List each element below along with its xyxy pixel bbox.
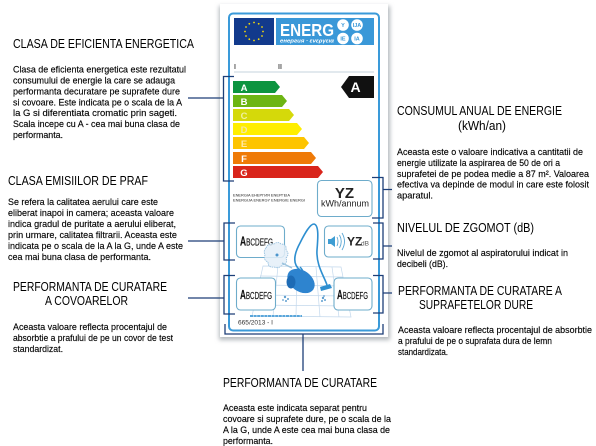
energy label card [219, 4, 390, 340]
text: cleaning performance [223, 403, 392, 446]
bracket: noise [373, 223, 392, 259]
icon: dust specks [282, 295, 326, 302]
dust band [250, 315, 302, 317]
text: annual energy consumption: energie utilizate la aspirarea de 50 de ori a [397, 158, 561, 168]
energy consumption box [318, 180, 372, 216]
efficiency scale arrows [233, 81, 323, 179]
noise box [324, 226, 372, 257]
text: efficiency class: Scala incepe cu A - cea mai buna clasa de [13, 119, 180, 129]
text: noise level [397, 248, 568, 269]
icon: EU flag [234, 18, 274, 45]
efficiency scale arrows: E [241, 139, 247, 150]
energy header band: IJA [353, 23, 361, 29]
multilingual energy text [233, 194, 305, 202]
heading: carpet cleaning performance: A COVOARELOR [45, 294, 128, 308]
heading: cleaning performance: PERFORMANTA DE CURATARE [223, 376, 377, 390]
heading: hard floor cleaning performance: PERFORMANTA DE CURATARE A [398, 284, 563, 298]
text: carpet cleaning performance: standardizat. [13, 344, 63, 354]
bracket: carpet performance [188, 276, 235, 314]
text: dust emission class [8, 197, 183, 262]
heading: efficiency class: CLASA DE EFICIENTA ENERGETICA [13, 37, 195, 51]
heading: hard floor cleaning performance: SUPRAFETELOR DURE [419, 298, 533, 312]
energy header band: ENERG [280, 20, 334, 40]
dust emission box [236, 226, 284, 258]
energy header band [276, 18, 374, 45]
energy header band: Y [341, 23, 345, 29]
text: carpet cleaning performance [13, 322, 173, 354]
text: carpet cleaning performance: absorbtie a prafului de pe un covor de test [13, 333, 173, 343]
bracket: hard floor performance [373, 276, 392, 313]
text: hard floor cleaning performance: standardizata. [398, 347, 448, 357]
efficiency scale arrows: D [241, 125, 248, 136]
supplier and model row: I [234, 64, 236, 71]
text: hard floor cleaning performance: a prafului de pe o suprafata dura de lemn [398, 336, 552, 346]
text: efficiency class: si covoare. Este indicata pe o scala de la A [13, 98, 183, 108]
text: cleaning performance: covoare si suprafete dure, pe o scala de la [223, 414, 392, 424]
text: cleaning performance: A la G, unde A este cea mai buna clasa de [223, 425, 390, 435]
text: noise level: Nivelul de zgomot al aspiratorului indicat in [397, 248, 568, 258]
icon: vacuum cleaner [283, 224, 332, 298]
efficiency scale arrows: F [241, 154, 247, 165]
black class marker [341, 76, 374, 98]
dust emission box: ABCDEFG [240, 234, 273, 248]
black class marker: A [350, 79, 361, 95]
text: dust emission class: indicata pe o scala de la A la G, unde A este [8, 241, 183, 251]
bracket: cleaning performance [225, 324, 383, 371]
energy header band: енергия · ενεργεια [280, 38, 335, 44]
text: hard floor cleaning performance [398, 325, 592, 357]
text: efficiency class: Clasa de eficienta energetica este rezultatul [13, 64, 186, 74]
text: cleaning performance: performanta. [223, 436, 273, 446]
text: cleaning performance: Aceasta este indicata separat pentru [223, 403, 367, 413]
multilingual energy text: ENERGIA ЕНЕРГИЯ ΕΝΕΡΓΕΙΑ [233, 194, 291, 198]
text: carpet cleaning performance: Aceasta valoare reflecta procentajul de [13, 322, 167, 332]
heading: carpet cleaning performance [13, 280, 167, 308]
heading: noise level: NIVELUL DE ZGOMOT (dB) [397, 221, 534, 235]
supplier and model row: II [278, 64, 282, 71]
floor grid [252, 266, 351, 317]
text: dust emission class: cea mai buna clasa de performanta. [8, 252, 151, 262]
icon: dust cloud [264, 242, 292, 268]
text: efficiency class: la G si diferentiata cromatic prin sageti. [13, 108, 177, 118]
carpet cleaning box: ABCDEFG [240, 287, 272, 302]
hard floor cleaning box [334, 278, 372, 310]
heading: carpet cleaning performance: PERFORMANTA DE CURATARE [13, 280, 167, 294]
efficiency scale arrows: C [241, 111, 248, 122]
text: annual energy consumption [397, 147, 590, 200]
efficiency scale arrows: A [241, 83, 248, 94]
text: efficiency class: consumului de energie la care se adauga [13, 76, 176, 86]
text: dust emission class: prin urmare, calitatea filtrarii. Aceasta este [8, 230, 177, 240]
text: annual energy consumption: aparatul. [397, 190, 433, 200]
text: dust emission class: Se refera la calitatea aerului care este [8, 197, 158, 207]
carpet cleaning box [236, 278, 276, 310]
energy header band: IA [354, 36, 360, 42]
supplier and model row [234, 64, 374, 72]
bracket: dust emission [188, 223, 235, 260]
hard floor cleaning box: ABCDEFG [337, 287, 368, 302]
heading: annual energy consumption: (kWh/an) [458, 119, 506, 133]
bracket: efficiency class [188, 76, 234, 181]
text: hard floor cleaning performance: Aceasta valoare reflecta procentajul de absorbtie [398, 325, 592, 335]
efficiency scale arrows: G [240, 168, 248, 179]
efficiency scale arrows: B [241, 97, 248, 108]
text: efficiency class [13, 64, 186, 140]
regulation number: 665/2013 - I [238, 320, 273, 326]
text: dust emission class: indica gradul de puritate a aerului eliberat, [8, 219, 176, 229]
text: annual energy consumption: Aceasta este o valoare indicativa a cantitatii de [397, 147, 583, 157]
heading: annual energy consumption: CONSUMUL ANUAL DE ENERGIE [397, 104, 562, 118]
energy consumption box: YZ [335, 185, 354, 202]
noise box: dB [361, 240, 369, 248]
energy consumption box: kWh/annum [321, 198, 369, 208]
text: annual energy consumption: efectiva va depinde de modul in care este folosit [397, 180, 589, 190]
text: noise level: decibeli (dB). [397, 259, 448, 269]
multilingual energy text: ENERGIJA ENERGY ENERGIE ENERGI [233, 198, 305, 202]
text: dust emission class: eliberat inapoi in camera; aceasta valoare [8, 208, 174, 218]
text: efficiency class: performanta decuratare pe suprafete dure [13, 86, 180, 96]
energy header band: IE [340, 36, 346, 42]
noise box: YZ [347, 234, 362, 248]
text: annual energy consumption: suprafetei de pe podea medie a 87 m². Valoarea [397, 169, 590, 179]
heading: hard floor cleaning performance [398, 284, 563, 312]
heading: annual energy consumption [397, 104, 562, 133]
bracket: energy consumption [372, 178, 392, 218]
text: efficiency class: performanta. [13, 130, 63, 140]
heading: dust emission class: CLASA EMISIILOR DE PRAF [8, 174, 148, 188]
